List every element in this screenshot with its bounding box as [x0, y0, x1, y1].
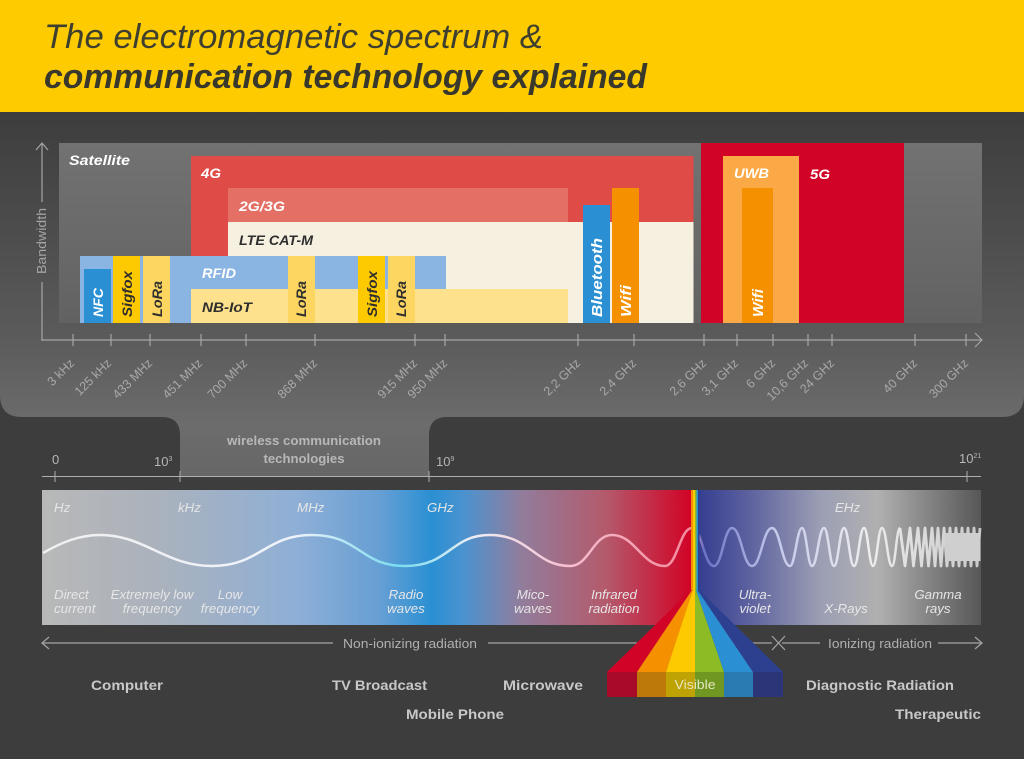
band: LoRa 868: LoRa [293, 281, 309, 317]
band labels: frequency [201, 601, 261, 616]
band labels [54, 500, 962, 616]
frequency labels: 125 kHz [72, 356, 114, 399]
panel: wireless communication technologies [0, 112, 1024, 477]
band: NFC [84, 269, 111, 323]
frequency labels [45, 356, 971, 403]
applications: TV Broadcast [332, 677, 427, 693]
frequency labels: 3,1 GHz [699, 356, 741, 399]
applications: Mobile Phone [406, 706, 504, 722]
frequency labels: 3 kHz [45, 356, 77, 389]
tab label: wireless communication technologies: wireless communication [226, 434, 381, 448]
frequency labels: 300 GHz [926, 356, 971, 401]
frequency labels: 6 GHz [743, 356, 778, 391]
title banner: The electromagnetic spectrum & [44, 18, 543, 56]
applications: Computer [91, 677, 164, 693]
band: UWB [723, 156, 799, 323]
band: LTE CAT-M [228, 222, 694, 323]
band labels: MHz [297, 500, 325, 515]
band: UWB: UWB [734, 165, 769, 181]
band: NB-IoT [191, 289, 568, 323]
band labels: violet [739, 601, 772, 616]
band: 5G [701, 143, 904, 323]
frequency labels: 700 MHz [205, 356, 250, 401]
frequency scale [42, 451, 981, 482]
frequency labels: 868 MHz [275, 356, 320, 401]
band: RFID [80, 256, 446, 323]
axis: frequency ticks [42, 333, 982, 347]
title banner [0, 0, 1024, 112]
band: 2G/3G [228, 188, 568, 222]
band labels: EHz [835, 500, 860, 515]
frequency scale: 10 [154, 454, 168, 469]
band: 4G [191, 156, 694, 323]
wave [43, 528, 980, 566]
band: NB-IoT: NB-IoT [202, 299, 254, 315]
tab label: wireless communication technologies [226, 434, 381, 466]
band: 5G: 5G [810, 166, 830, 182]
prism beam [607, 590, 783, 672]
frequency labels: 950 MHz [405, 356, 450, 401]
band labels: Gamma [914, 587, 962, 602]
band: RFID: RFID [202, 265, 236, 281]
tab label: wireless communication technologies: technologies [264, 452, 345, 466]
chart: bandwidth by frequency [59, 143, 982, 323]
band: LoRa low: LoRa [149, 281, 165, 317]
frequency scale: 21 [973, 453, 981, 460]
band labels: Radio [389, 587, 423, 602]
band labels: frequency [123, 601, 183, 616]
frequency labels: 2,4 GHz [597, 356, 639, 399]
band labels: GHz [427, 500, 454, 515]
spectrum bar [42, 490, 981, 625]
band: Satellite: Satellite [69, 152, 130, 168]
band: LoRa 915 [388, 256, 415, 323]
band: Wifi 2.4 GHz: Wifi [618, 284, 635, 317]
frequency scale: 0 [52, 452, 59, 467]
frequency labels: 2,2 GHz [541, 356, 583, 399]
frequency labels: 451 MHz [160, 356, 205, 401]
band: NFC: NFC [90, 287, 106, 317]
prism base: Visible [674, 677, 716, 692]
band: Sigfox low [113, 256, 140, 323]
radiation ranges [42, 636, 982, 651]
frequency scale: 10 [959, 451, 973, 466]
band: Bluetooth: Bluetooth [589, 238, 606, 317]
band: Wifi 2.4 GHz [612, 188, 639, 323]
frequency labels: 40 GHz [880, 356, 920, 396]
band labels: waves [514, 601, 552, 616]
title banner: communication technology explained [44, 58, 648, 96]
frequency labels: 2,6 GHz [667, 356, 709, 399]
band labels: Infrared [591, 587, 638, 602]
band: Satellite [59, 143, 982, 323]
band: Wifi 6 GHz: Wifi [750, 288, 767, 317]
frequency labels: 24 GHz [797, 356, 837, 396]
frequency labels: 433 MHz [110, 356, 155, 401]
band: Sigfox low: Sigfox [119, 270, 135, 317]
frequency scale: 10 [436, 454, 450, 469]
band: LoRa 868 [288, 256, 315, 323]
frequency labels: 10,6 GHz [764, 356, 811, 403]
band: LTE CAT-M: LTE CAT-M [239, 232, 313, 248]
applications [91, 677, 981, 722]
frequency labels: 915 MHz [375, 356, 420, 401]
band: Wifi 6 GHz [742, 188, 773, 323]
band labels: Mico- [517, 587, 550, 602]
band: Sigfox 915: Sigfox [364, 270, 380, 317]
band labels: Low [218, 587, 244, 602]
band: 2G/3G: 2G/3G [238, 198, 285, 214]
band labels: rays [925, 601, 951, 616]
axis: bandwidth: Bandwidth [35, 208, 49, 274]
band: 4G: 4G [200, 165, 221, 181]
applications: Diagnostic Radiation [806, 677, 954, 693]
frequency scale: 3 [168, 456, 172, 463]
band: LoRa low [143, 256, 170, 323]
visible light prism [607, 490, 783, 697]
band: Bluetooth [583, 205, 610, 323]
band labels: Direct [54, 587, 90, 602]
axis: bandwidth [35, 143, 49, 341]
band labels: kHz [178, 500, 201, 515]
applications: Microwave [503, 677, 583, 693]
frequency scale: 9 [450, 456, 454, 463]
applications: Therapeutic [895, 706, 981, 722]
prism stripe [691, 490, 700, 592]
band labels: radiation [588, 601, 640, 616]
prism base [607, 672, 783, 697]
band labels: waves [387, 601, 425, 616]
band labels: current [54, 601, 97, 616]
band labels: Ultra- [739, 587, 772, 602]
band: Sigfox 915 [358, 256, 385, 323]
radiation ranges: Non-ionizing radiation [343, 636, 477, 651]
band labels: Extremely low [111, 587, 195, 602]
band labels: Hz [54, 500, 71, 515]
band: LoRa 915: LoRa [393, 281, 409, 317]
band labels: X-Rays [823, 601, 868, 616]
radiation ranges: Ionizing radiation [828, 636, 932, 651]
